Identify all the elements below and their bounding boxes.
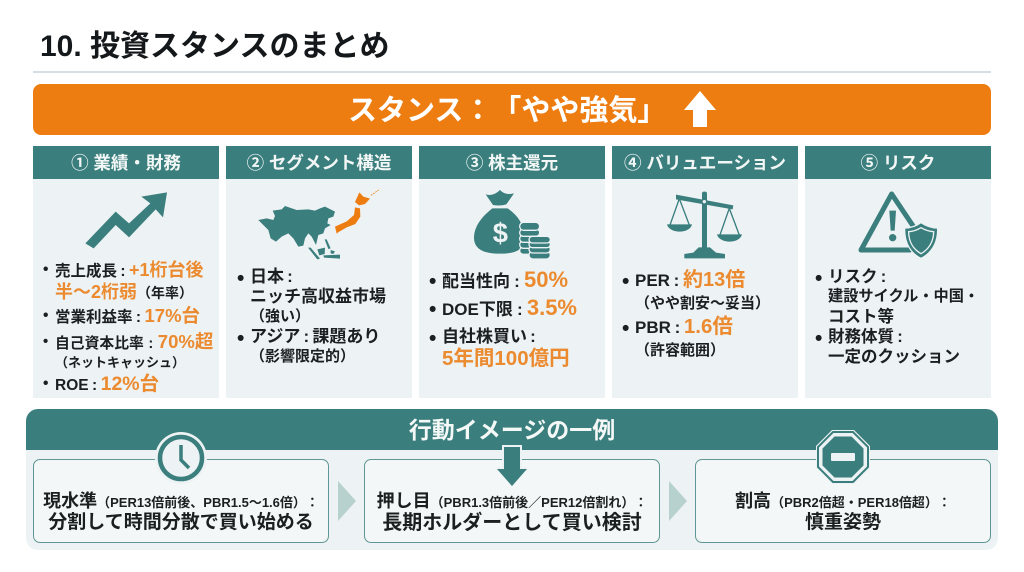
action heading: 行動イメージの一例 [409,417,615,443]
Japan item [237,267,386,325]
overvalued condition: 割高（PBR2倍超・PER18倍超）： [735,491,951,511]
ROE: ROE 12%台 [55,373,159,395]
panel heading [226,146,412,179]
Asia item: アジア 課題あり [250,327,380,346]
panel heading: ① 業績・財務 [71,153,181,173]
PER: PER 約13倍 [635,269,745,291]
box: current level [33,459,329,543]
equity ratio: 自己資本比率 70%超 [55,331,213,352]
stance banner [33,84,991,135]
sales growth: 売上成長 +1桁台後 [55,260,204,280]
panel: 業績・財務: • [43,375,48,392]
panel: バリュエーション: • [622,317,629,340]
equity ratio [43,331,213,370]
current level action: 分割して時間分散で買い始める [48,512,314,533]
payout ratio: 配当性向 50% [442,267,568,292]
risk item: : [881,268,886,286]
operating margin: 営業利益率 17%台 [55,305,200,326]
ROE: : [92,377,97,394]
panel heading [419,146,605,179]
sales growth: 半〜2桁弱（年率） [55,282,193,302]
panel heading: ② セグメント構造 [247,153,391,173]
risk item: リスク [828,268,878,286]
Japan item: （強い） [250,308,310,325]
DOE floor: : [517,300,523,319]
equity ratio: （ネットキャッシュ） [55,355,185,370]
arrow: chevron two [669,481,687,521]
PER [622,268,770,312]
operating margin: : [136,309,141,326]
panel: リスク: • [815,327,822,350]
arrow: chevron one [338,481,356,521]
panel: バリュエーション [612,146,798,398]
icon: down arrow [497,445,527,486]
pullback action: 長期ホルダーとして買い検討 [382,512,642,534]
DOE floor: DOE下限 3.5% [442,295,577,320]
Asia item: （影響限定的） [250,348,355,365]
share buyback [429,327,570,370]
financial item: : [897,328,903,346]
icon: money bag and coins [474,190,550,258]
PER: : [674,271,679,290]
PBR [622,315,733,359]
icon: stop sign [816,430,870,483]
title: 10. 投資スタンスのまとめ [40,30,389,63]
panel: 業績・財務 [33,146,219,398]
icon: balance scale [667,192,742,258]
risk item: 建設サイクル・中国・ [828,288,979,305]
panel: セグメント構造: • [237,327,244,350]
risk item: コスト等 [828,308,894,326]
stance text: スタンス：「やや強気」 [348,95,666,127]
icon: Asia map with Japan [258,190,379,260]
risk item [815,267,979,326]
icon: warning with shield [858,192,937,258]
panel: 業績・財務: • [43,334,48,350]
icon: rising arrow [85,192,167,248]
PBR: : [675,318,680,337]
panel: セグメント構造 [226,146,412,398]
Asia item: : [303,327,309,346]
panel: リスク: • [815,267,822,290]
panel heading: ④ バリュエーション [624,153,786,173]
financial item: 一定のクッション [828,348,960,366]
panel heading [612,146,798,179]
payout ratio: : [514,272,520,291]
overvalued action: 慎重姿勢 [805,512,881,533]
Asia item [237,327,380,365]
panel: 株主還元: • [429,298,436,321]
PBR: （許容範囲） [635,342,725,359]
panel: バリュエーション: • [622,270,629,293]
panel heading [33,146,219,179]
panel heading [805,146,991,179]
panel: リスク [805,146,991,398]
Japan item: : [287,267,293,286]
panel: action examples [26,409,998,550]
panel: 株主還元: • [429,327,436,350]
action heading [26,409,998,450]
current level condition: 現水準（PER13倍前後、PBR1.5〜1.6倍）： [43,491,319,511]
PBR: PBR 1.6倍 [635,315,733,338]
icon: clock [155,432,207,482]
share buyback: : [530,327,536,346]
share buyback: 5年間100億円 [442,347,570,370]
icon: money bag and coins: $ [493,218,508,249]
panel: セグメント構造: • [237,267,244,290]
panel heading: ③ 株主還元 [466,153,558,173]
financial item: 財務体質 [828,328,894,346]
financial item [815,327,960,366]
sales growth [43,260,204,302]
panel: 業績・財務: • [43,261,48,278]
equity ratio: : [148,336,153,352]
panel heading: ⑤ リスク [861,153,935,173]
sales growth: : [120,263,126,280]
panel: 株主還元 [419,146,605,398]
pullback condition: 押し目（PBR1.3倍前後／PER12倍割れ）： [377,491,647,511]
box: pullback [364,459,660,543]
Japan item: 日本 [250,267,284,286]
panel: 株主還元: • [429,270,436,293]
box: overvalued [695,459,991,543]
Japan item: ニッチ高収益市場 [250,287,386,306]
icon: up arrow [684,91,716,127]
share buyback: 自社株買い [442,327,527,346]
panel: 業績・財務: • [43,307,48,324]
PER: （やや割安〜妥当） [635,295,770,312]
